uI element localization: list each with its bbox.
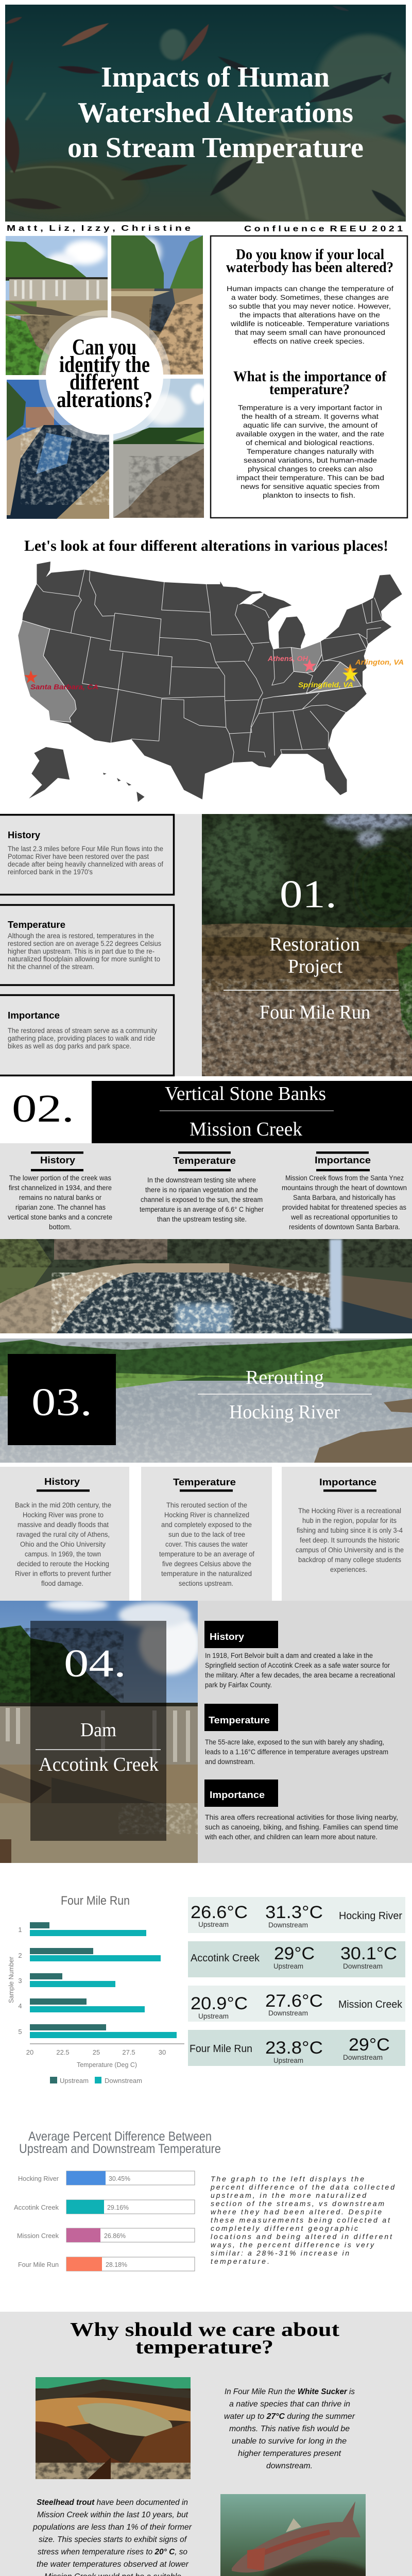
stat card: Four Mile Run <box>188 2030 405 2066</box>
card: temperature: Hocking River is channelized <box>164 1511 249 1519</box>
panel: why care about temperature <box>0 2312 412 2576</box>
progress bars: percent difference: 26.86% <box>104 2232 126 2240</box>
map of the United States <box>18 562 404 802</box>
photo: white sucker <box>36 2377 191 2479</box>
marker: Springfield star <box>342 667 358 682</box>
panel: temperature: restored section are on average 5.22 degrees Celsius <box>8 940 161 947</box>
column: importance: residents of downtown Santa Barbara. <box>289 1223 400 1231</box>
card: temperature: This rerouted section of the <box>166 1501 247 1509</box>
white question circle <box>46 317 163 435</box>
title: Hocking River: Hocking River <box>229 1401 340 1423</box>
photo: dam <box>6 236 108 375</box>
heading: local waterbody: Do you know if your local <box>236 246 384 263</box>
column: history: vertical stone banks and a concrete <box>8 1213 112 1221</box>
text block: temperature <box>205 1738 388 1766</box>
text block: human impacts <box>227 284 393 345</box>
panel: history <box>0 815 174 894</box>
photo: dam <box>0 1601 198 1863</box>
label: temperature: Temperature <box>209 1715 270 1725</box>
bar chart: Four Mile Run temperatures: Four Mile Run <box>61 1894 130 1908</box>
column: temperature: temperature is an average of 6.6° C higher <box>140 1206 264 1213</box>
chart title: average percent difference: Average Percent Difference Between <box>28 2129 212 2144</box>
text: steelhead trout: Steelhead trout have been documented in <box>37 2498 188 2507</box>
card: importance: Importance <box>319 1477 376 1487</box>
section 04: Accotink Creek <box>0 1599 412 1863</box>
photo: stream bed <box>111 235 203 375</box>
heading: why care: Why should we care about <box>70 2319 339 2341</box>
heading: local waterbody <box>226 246 393 276</box>
column: temperature: than the upstream testing site. <box>157 1215 247 1223</box>
stat card: Mission Creek <box>188 1986 405 2022</box>
stat card: Hocking River <box>188 1897 405 1933</box>
panel: intro questions <box>211 236 407 518</box>
card: temperature: sun due to the lack of tree <box>168 1531 245 1538</box>
text block: importance: with each other, and children can learn more about nature. <box>204 1833 377 1841</box>
heading: local waterbody: waterbody has been altered? <box>226 259 393 276</box>
chart legend: Upstream <box>60 2077 89 2084</box>
text block: graph explanation: where they had been altered. Despite <box>211 2208 382 2216</box>
title: Four Mile Run: Four Mile Run <box>260 1002 370 1023</box>
panel: temperature: hit the channel of the stream. <box>8 963 94 971</box>
bar chart: Four Mile Run temperatures: 30 <box>159 2048 166 2056</box>
number 01: 01. <box>280 873 337 916</box>
card: importance: backdrop of many college students <box>298 1556 401 1564</box>
stat card: Hocking River: Upstream <box>198 1921 229 1928</box>
label: importance <box>204 1780 278 1807</box>
photo: rerouted Hocking River <box>0 1338 412 1463</box>
stat card: Hocking River: 26.6°C <box>191 1903 248 1922</box>
photo: stone channel <box>0 1239 412 1333</box>
card: importance <box>282 1467 412 1601</box>
text: white sucker: downstream. <box>266 2462 313 2470</box>
progress bars: percent difference: 29.16% <box>107 2204 129 2211</box>
column: history: History <box>40 1155 75 1165</box>
heading: four alterations: Let's look at four different alterations in various places! <box>24 537 388 554</box>
panel: history: reinforced bank in the 1970's <box>8 868 93 876</box>
column: history: riparian zone. The channel has <box>15 1204 106 1211</box>
text block: human impacts: so subtle that you may never notice. However, <box>229 302 391 310</box>
translucent title panel: Dam <box>80 1719 116 1741</box>
text block: human impacts: the impacts that alterations have on the <box>239 311 380 319</box>
bar chart: Four Mile Run temperatures: 5 <box>18 2028 22 2036</box>
card: temperature: and completely exposed to the <box>161 1521 252 1529</box>
title: rerouting: Rerouting <box>246 1367 324 1388</box>
bar chart: Four Mile Run temperatures: 2 <box>18 1952 22 1959</box>
text block: graph explanation: section of the streams, vs downstream <box>211 2199 384 2208</box>
bar chart: Four Mile Run temperatures: 22.5 <box>56 2048 70 2056</box>
panel: importance <box>0 995 174 1076</box>
label: Athens: Athens, OH <box>267 654 308 663</box>
text block: temperature importance: Temperature is a very important factor in <box>238 403 382 412</box>
panel: history: History <box>8 830 40 840</box>
bar chart: Four Mile Run temperatures: 3 <box>18 1977 22 1985</box>
panel: importance: gathering place, providing places to walk and ride <box>8 1035 155 1042</box>
photo: rerouted river <box>113 379 204 518</box>
text block: temperature importance: plankton to insects to fish. <box>263 491 355 499</box>
text: white sucker: In Four Mile Run the White Sucker is <box>225 2387 355 2396</box>
card: importance: The Hocking River is a recreational <box>298 1507 401 1515</box>
translucent title panel <box>30 1621 166 1841</box>
stat card: Four Mile Run: Four Mile Run <box>190 2043 252 2055</box>
translucent ring <box>39 310 170 442</box>
white question circle: different <box>70 369 139 395</box>
marker: Arlington star <box>344 664 357 676</box>
text block: human impacts: effects on native creek species. <box>253 337 365 345</box>
section 03: Hocking River <box>0 1338 412 1601</box>
text block: human impacts: that may seem small can have pronounced <box>235 328 385 336</box>
stat card: Hocking River: 31.3°C <box>265 1903 323 1922</box>
stat card: Accotink Creek <box>188 1941 405 1977</box>
stat card: Accotink Creek: 30.1°C <box>340 1944 397 1963</box>
translucent title panel: 04. <box>64 1642 126 1685</box>
card: importance: hub in the region, popular for its <box>302 1517 397 1524</box>
label: Springfield: Springfield, VA <box>298 681 353 689</box>
panel: importance: The restored areas of stream serve as a community <box>8 1027 157 1035</box>
panel: importance: bikes as well as dog parks and park space. <box>8 1042 131 1050</box>
text: steelhead trout <box>32 2498 192 2576</box>
text: white sucker: a native species that can thrive in <box>229 2400 350 2409</box>
text block: temperature importance: news for sensitive aquatic species from <box>241 482 380 490</box>
stat card: Accotink Creek: Accotink Creek <box>191 1953 260 1964</box>
bar chart: Four Mile Run temperatures: 25 <box>93 2048 100 2056</box>
text block: history <box>205 1652 395 1689</box>
text block: graph explanation: upstream, in the more naturalized <box>211 2191 367 2199</box>
title: on Stream Temperature <box>67 132 364 164</box>
panel: temperature: Temperature <box>8 920 65 930</box>
bar chart: Four Mile Run temperatures: Temperature (Deg C) <box>77 2061 137 2069</box>
title banner <box>92 1081 412 1143</box>
panel: temperature <box>0 905 174 985</box>
text block: history: Springfield section of Accotink Creek as a safe water source for <box>205 1662 390 1669</box>
stat card: Accotink Creek: Upstream <box>273 1962 303 1970</box>
panel: history: decade after being heavily channelized with areas of <box>8 860 163 868</box>
column: importance: well as recreational opportunities to <box>290 1213 398 1221</box>
text block: graph explanation: The graph to the left displays the <box>211 2175 364 2183</box>
card: importance: campus of Ohio University and is the <box>296 1546 404 1554</box>
authors line: M a t t , L i z , I z z y , C h r i s t i n e <box>7 224 191 233</box>
text block: temperature: The 55-acre lake, exposed to the sun with barely any shading, <box>205 1738 384 1746</box>
label: history <box>204 1621 278 1648</box>
number 03 block <box>8 1354 116 1445</box>
column: history: remains no natural banks or <box>19 1194 101 1201</box>
text block: importance: This area offers recreational activities for those living nearby, <box>205 1814 398 1821</box>
column: importance: Importance <box>315 1155 371 1165</box>
bar chart: Four Mile Run temperatures: 20 <box>26 2048 33 2056</box>
progress bars: percent difference: 28.18% <box>106 2261 127 2268</box>
column: importance: Santa Barbara, and historically has <box>293 1194 396 1201</box>
text block: temperature: and downstream. <box>205 1758 255 1766</box>
text block: temperature: leads to a 1.16°C difference in temperature averages upstream <box>205 1748 388 1756</box>
card: importance: experiences. <box>330 1566 367 1573</box>
stat card: Four Mile Run: Upstream <box>273 2057 303 2064</box>
title: Impacts of Human <box>101 61 330 93</box>
heading: importance of temperature: What is the importance of <box>233 368 386 385</box>
text: white sucker: unable to survive for long in the <box>232 2437 347 2446</box>
label: importance: Importance <box>210 1790 265 1800</box>
panel: importance: Importance <box>8 1010 60 1021</box>
white question circle: identify the <box>59 352 150 377</box>
heading: importance of temperature: temperature? <box>269 381 350 398</box>
text block: temperature importance: of chemical and biological reactions. <box>246 438 374 447</box>
panel: temperature: naturalized floodplain allowing for more sunlight to <box>8 955 160 963</box>
chart legend: Downstream <box>105 2077 142 2084</box>
progress bars: percent difference: Four Mile Run <box>18 2261 59 2268</box>
panel: history: Potomac River have been restored over the past <box>8 853 149 860</box>
section 02: Mission Creek <box>0 1081 412 1333</box>
card: temperature: cover. This causes the water <box>165 1540 248 1548</box>
text: steelhead trout: size. This species starts to exhibit signs of <box>39 2535 187 2544</box>
title: restoration project: Project <box>288 956 342 977</box>
stat card: Mission Creek: Mission Creek <box>338 1999 403 2010</box>
progress bars: percent difference: Hocking River <box>18 2175 59 2182</box>
column: importance: provided habitat for threatened species as <box>282 1204 406 1211</box>
card: history: decided to reroute the Hocking <box>17 1560 109 1568</box>
text block: importance <box>204 1814 398 1841</box>
stat card: Accotink Creek: 29°C <box>274 1944 315 1963</box>
text block: graph explanation: similar: a 28%-31% increase in <box>211 2249 349 2257</box>
photo: restored stream <box>202 814 412 1076</box>
card: temperature: five degrees Celsius above the <box>162 1560 251 1568</box>
title: restoration project: Restoration <box>269 934 360 955</box>
text block: temperature importance <box>236 403 384 499</box>
text block: human impacts: a water body. Sometimes, these changes are <box>231 293 389 301</box>
text block: human impacts: Human impacts can change the temperature of <box>227 284 393 293</box>
text block: importance: such as canoeing, biking, and fishing. Families can spend time <box>205 1823 398 1831</box>
text: steelhead trout: populations are less than 1% of their former <box>32 2523 192 2532</box>
title banner: Vertical Stone Banks <box>165 1083 326 1105</box>
chart legend <box>50 2077 142 2084</box>
text block: human impacts: wildlife is noticeable. Temperature variations <box>230 319 389 328</box>
stat card: Accotink Creek: Downstream <box>343 1962 383 1970</box>
stat card: Mission Creek: 27.6°C <box>265 1991 323 2011</box>
label: Arlington: Arlington, VA <box>355 658 404 666</box>
card: history: flood damage. <box>41 1580 83 1587</box>
column: history: The lower portion of the creek was <box>9 1174 111 1182</box>
text block: graph explanation: completely different geographic <box>211 2224 358 2232</box>
text block: temperature importance: seasonal variations, but human-made <box>244 456 377 464</box>
card: history: campus. In 1969, the town <box>25 1550 101 1558</box>
panel: temperature: Although the area is restored, temperatures in the <box>8 932 154 940</box>
card: history: massive and deadly floods that <box>18 1521 109 1529</box>
card: history <box>0 1467 129 1601</box>
stat card: Mission Creek: Upstream <box>198 2012 229 2020</box>
chart title: average percent difference <box>19 2129 221 2156</box>
column: importance: Mission Creek flows from the Santa Ynez <box>285 1174 404 1182</box>
card: history: ravaged the rural city of Athens, <box>16 1531 110 1538</box>
text: steelhead trout: Mission Creek within the last 10 years, but <box>37 2511 188 2519</box>
label: temperature <box>204 1704 278 1731</box>
bar chart: Four Mile Run temperatures: Sample Number <box>7 1956 15 2003</box>
stat card: Mission Creek: Downstream <box>268 2009 308 2017</box>
state highlight: California <box>18 620 76 722</box>
text block: temperature importance: aquatic life can survive, the amount of <box>243 421 377 429</box>
card: history: River in efforts to prevent further <box>15 1570 111 1578</box>
text panel <box>198 1601 412 1863</box>
bar chart: Four Mile Run temperatures: 1 <box>18 1926 22 1934</box>
card: history: Hocking River was prone to <box>23 1511 104 1519</box>
panel: history: The last 2.3 miles before Four Mile Run flows into the <box>8 845 163 853</box>
bar chart: Four Mile Run temperatures <box>7 1894 184 2084</box>
text block: graph explanation: temperature. <box>211 2257 269 2265</box>
panel: photo collage <box>6 235 206 519</box>
text block: temperature importance: Temperature changes naturally with <box>247 447 374 455</box>
title banner: Mission Creek <box>190 1118 302 1140</box>
text block: history: the military. After a few decades, the area became a recreational <box>205 1671 395 1679</box>
text block: graph explanation: percent difference of the data collected <box>210 2183 395 2191</box>
stat card: Four Mile Run: 29°C <box>349 2035 390 2055</box>
title: Watershed Alterations <box>78 97 353 129</box>
column: temperature: channel is exposed to the sun, the stream <box>141 1196 263 1204</box>
text: steelhead trout: stress when temperature rises to 20° C, so <box>38 2548 187 2556</box>
stat card: Four Mile Run: 23.8°C <box>265 2038 323 2058</box>
text block: temperature importance: available oxygen in the water, and the rate <box>236 430 384 438</box>
translucent title panel: Accotink Creek <box>39 1754 159 1775</box>
text block: graph explanation: locations and being altered in different <box>211 2232 392 2241</box>
stat card: Hocking River: Downstream <box>268 1921 308 1929</box>
card: temperature <box>141 1467 272 1601</box>
column: history: bottom. <box>49 1223 72 1231</box>
text block: temperature importance: the health of a stream. It governs what <box>242 412 379 420</box>
column: temperature: Temperature <box>173 1156 236 1166</box>
column: history: first channelized in 1934, and there <box>9 1184 112 1192</box>
card: temperature: temperature in the naturalized <box>161 1570 252 1578</box>
column: temperature: In the downstream testing site where <box>147 1176 256 1184</box>
white question circle: alterations? <box>57 387 152 412</box>
text block: graph explanation <box>210 2175 395 2265</box>
conference line: C o n f l u e n c e R E E U 2 0 2 1 <box>244 225 403 233</box>
panel: hero banner <box>0 5 412 232</box>
title <box>67 61 364 164</box>
text: white sucker: water up to 27°C during the summer <box>224 2412 355 2421</box>
stat card: Mission Creek: 20.9°C <box>191 1994 248 2013</box>
photo: channelized creek <box>7 380 109 519</box>
panel: temperature: higher than upstream. This is in part due to the re- <box>8 947 154 955</box>
progress bars: percent difference <box>14 2171 195 2271</box>
number 03 block: 03. <box>31 1381 92 1424</box>
text: steelhead trout: the water temperatures observed at lower <box>37 2560 189 2569</box>
stat card: Hocking River: Hocking River <box>339 1910 402 1922</box>
progress bars: percent difference: Accotink Creek <box>14 2204 59 2211</box>
text block: history: park by Fairfax County. <box>205 1681 272 1689</box>
marker: Athens star <box>303 659 316 672</box>
card: temperature: sections upstream. <box>179 1580 233 1587</box>
state highlight: Virginia <box>306 662 362 694</box>
column: history <box>8 1151 112 1231</box>
section 01: Four Mile Run <box>0 811 412 1076</box>
bar chart: Four Mile Run temperatures: 4 <box>18 2002 22 2010</box>
title: restoration project <box>269 934 360 977</box>
chart title: average percent difference: Upstream and Downstream Temperature <box>19 2142 221 2156</box>
stat card: Four Mile Run: Downstream <box>343 2054 383 2061</box>
column: importance <box>282 1151 407 1231</box>
progress bars: percent difference: Mission Creek <box>17 2232 59 2240</box>
bar chart: Four Mile Run temperatures: 27.5 <box>122 2048 135 2056</box>
card: history: History <box>44 1477 80 1487</box>
text block: history: In 1918, Fort Belvoir built a dam and created a lake in the <box>205 1652 373 1659</box>
label: history: History <box>210 1632 244 1642</box>
card: importance: fishing and tubing since it is only 3-4 <box>297 1527 403 1534</box>
heading: why care <box>70 2319 339 2358</box>
text block: graph explanation: ways, the percent difference is very <box>211 2241 374 2249</box>
card: temperature: Temperature <box>173 1477 236 1487</box>
marker: Santa Barbara star <box>24 670 38 683</box>
number 02: 02. <box>12 1087 74 1130</box>
card: temperature: temperature to be an average of <box>159 1550 254 1558</box>
photo: steelhead trout <box>220 2494 366 2576</box>
hero photo: fish underwater <box>5 5 406 222</box>
text: white sucker: higher temperatures present <box>238 2449 341 2458</box>
column: temperature: there is no riparian vegetation and the <box>145 1186 258 1194</box>
white question circle: Can you <box>72 334 136 360</box>
text block: temperature importance: impact their temperature. This can be bad <box>236 473 384 482</box>
heading: importance of temperature <box>233 368 386 398</box>
state highlight: Ohio <box>291 641 322 673</box>
column: temperature <box>140 1151 264 1223</box>
text block: graph explanation: these measurements being collected at <box>211 2216 390 2224</box>
text block: temperature importance: physical changes to creeks can also <box>248 465 373 473</box>
text: white sucker: months. This native fish would be <box>229 2425 350 2433</box>
card: history: Back in the mid 20th century, the <box>15 1501 111 1509</box>
card: importance: feet deep. It surrounds the historic <box>300 1536 400 1544</box>
heading: why care: temperature? <box>135 2336 273 2358</box>
text: white sucker <box>224 2387 355 2470</box>
card: history: Ohio and the Ohio University <box>20 1540 106 1548</box>
label: Santa Barbara: Santa Barbara, CA <box>30 683 98 691</box>
column: importance: mountains through the heart of downtown <box>282 1184 407 1192</box>
progress bars: percent difference: 30.45% <box>109 2175 130 2182</box>
